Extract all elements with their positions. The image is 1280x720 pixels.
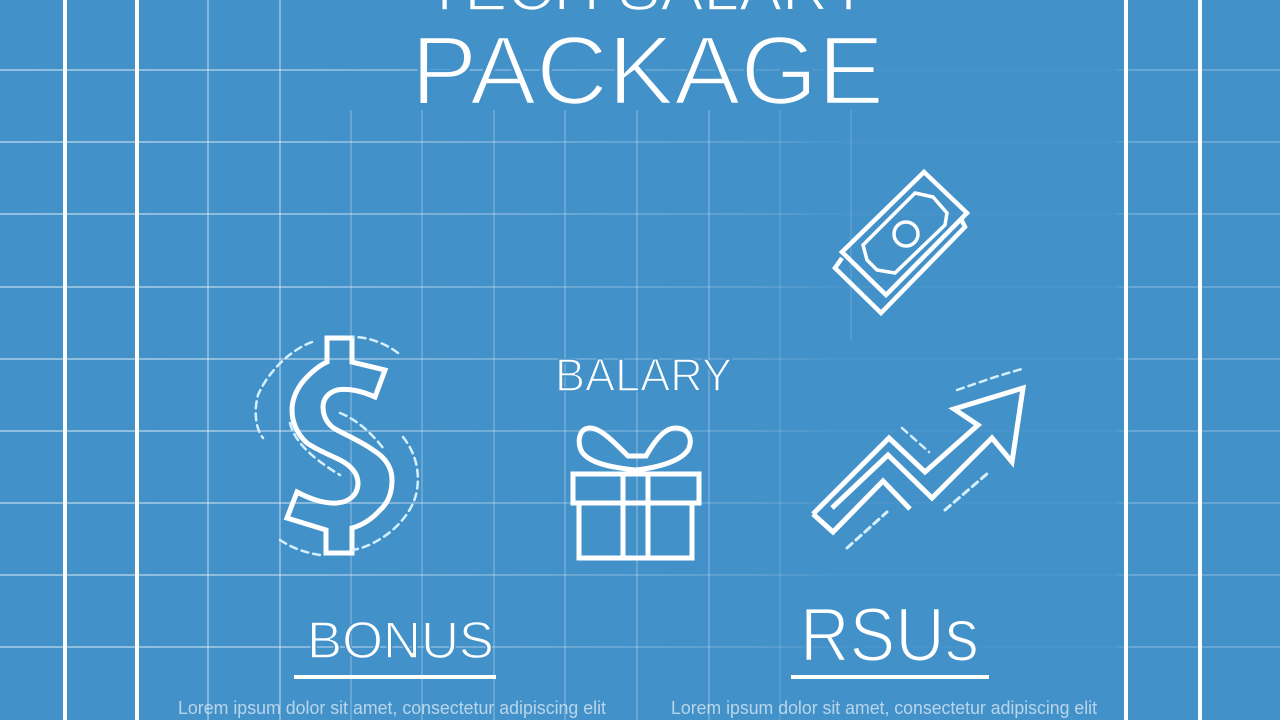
title: PACKAGE [411, 16, 884, 125]
icon: growth arrow [813, 369, 1023, 548]
panel: bonus: Lorem ipsum dolor sit amet, consectetur adipiscing elit [178, 698, 606, 718]
label: salary: BALARY [555, 349, 732, 401]
icon: cash stack [835, 172, 967, 313]
panel: bonus: BONUS [307, 612, 494, 670]
icon: dollar sign [256, 337, 418, 555]
panel: bonus [178, 612, 606, 718]
panel: RSUs: RSUs [800, 593, 979, 678]
icon: gift box [573, 428, 699, 558]
panel: RSUs [671, 593, 1097, 718]
panel: RSUs: Lorem ipsum dolor sit amet, consectetur adipiscing elit [671, 698, 1097, 718]
